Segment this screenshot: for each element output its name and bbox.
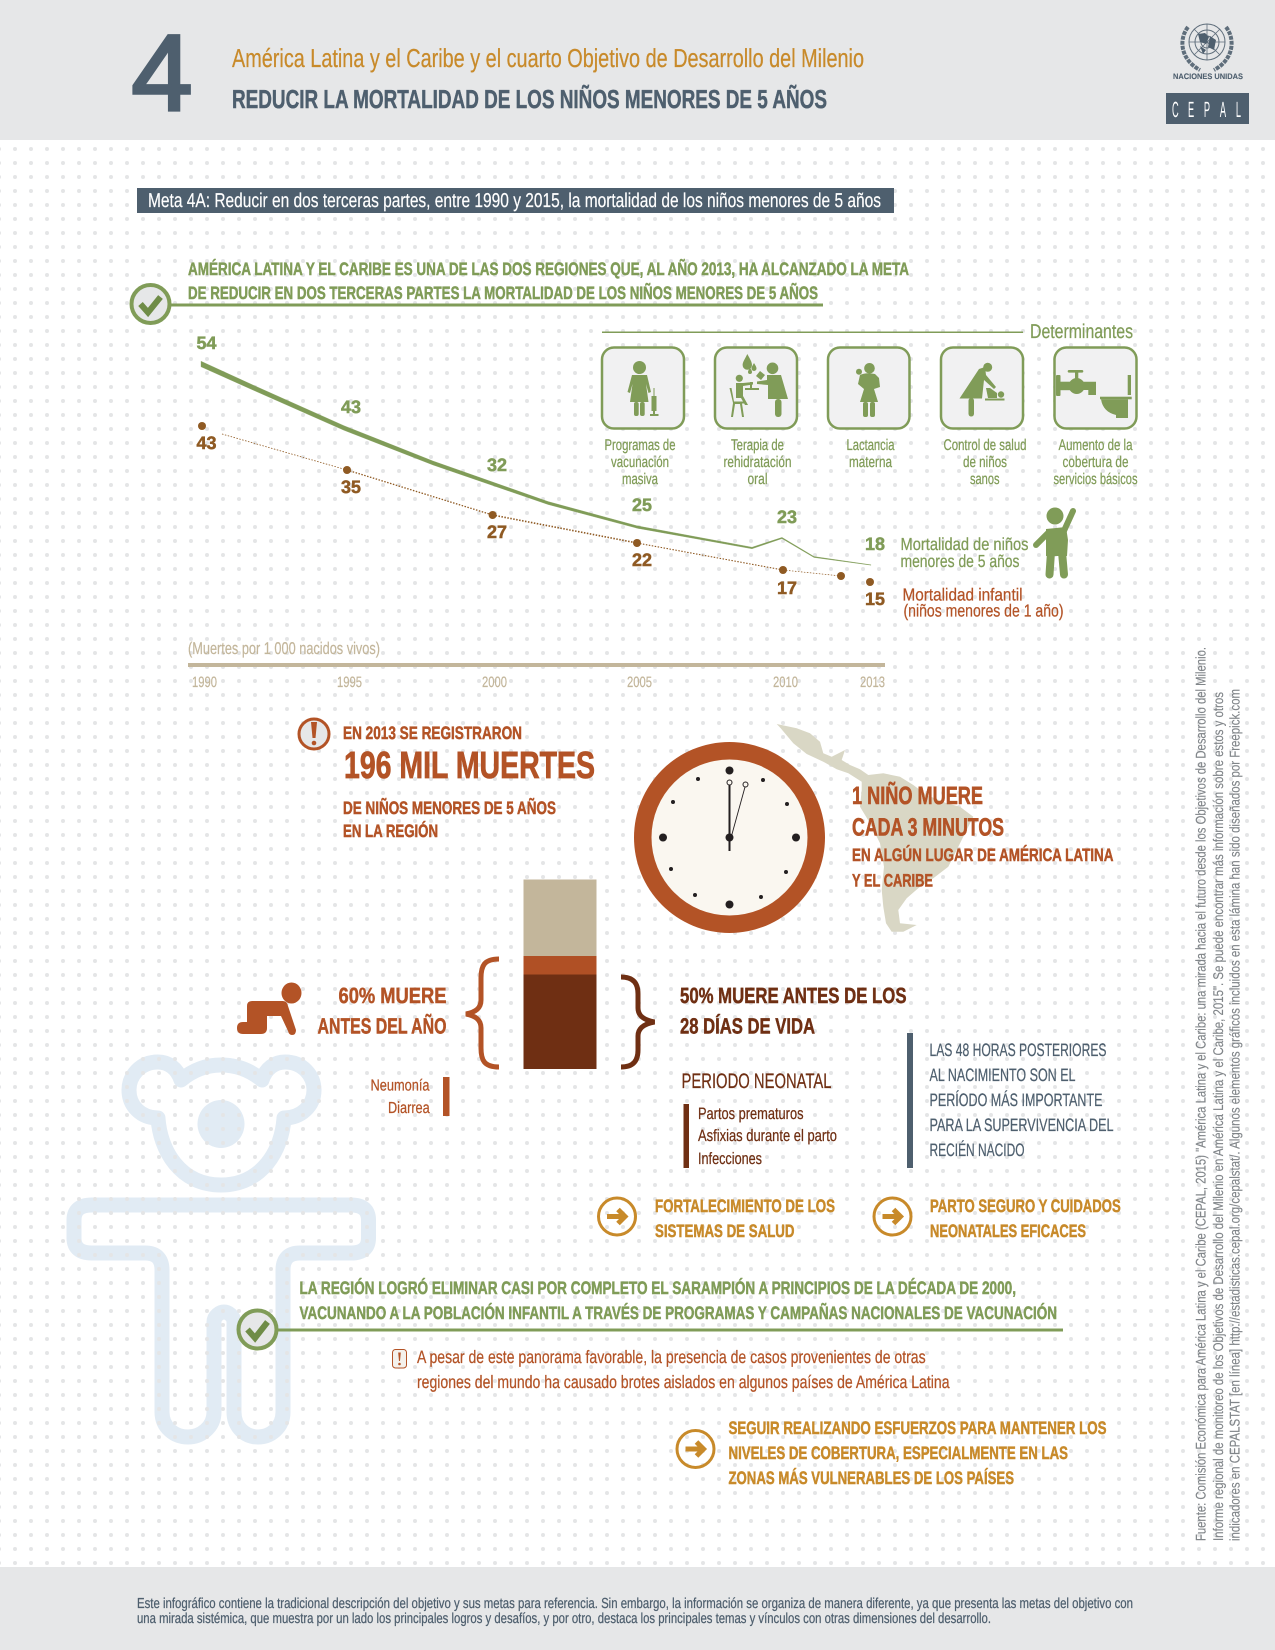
- text: 50% die before 28 days: 50% MUERE ANTES DE LOS: [680, 983, 906, 1008]
- text: 50% die before 28 days: 28 DÍAS DE VIDA: [680, 1014, 815, 1038]
- callout: first 48 hours: PERÍODO MÁS IMPORTANTE: [930, 1090, 1102, 1110]
- legend: under-5 mortality: menores de 5 años: [900, 551, 1020, 571]
- text: 60% die before one year: ANTES DEL AÑO: [318, 1014, 446, 1038]
- icon: mother caring for baby: [960, 363, 1004, 416]
- achievement: measles: [238, 1278, 1063, 1348]
- goal banner: Meta 4A: Reducir en dos terceras partes, entre 1990 y 2015, la mortalidad de los niños menores de 5 años: [148, 190, 881, 212]
- year labels: 2013: [860, 674, 885, 691]
- text: 50% die before 28 days: [680, 983, 906, 1038]
- list: post-neonatal causes: Diarrea: [388, 1100, 430, 1117]
- infant values: 35: [341, 477, 361, 497]
- callout: first 48 hours: PARA LA SUPERVIVENCIA DEL: [930, 1115, 1114, 1135]
- map: Latin America: [777, 724, 973, 932]
- list: post-neonatal causes: Neumonía: [370, 1078, 430, 1094]
- alert: deaths in 2013: DE NIÑOS MENORES DE 5 AÑOS: [343, 797, 556, 818]
- infant values: [196, 433, 885, 609]
- year labels: 1995: [337, 674, 362, 691]
- icon: arrow: [677, 1430, 714, 1468]
- alert: deaths in 2013: [299, 719, 595, 841]
- determinant: breastfeeding: materna: [849, 454, 892, 471]
- callout: one child every 3 minutes: 1 NIÑO MUERE: [852, 781, 983, 810]
- series: infant mortality dotted line: [222, 434, 841, 576]
- infant values: 22: [632, 550, 652, 570]
- year labels: 2000: [482, 674, 507, 691]
- action: keep coverage: ZONAS MÁS VULNERABLES DE LOS PAÍSES: [728, 1468, 1014, 1488]
- legend: infant mortality: [902, 584, 1064, 620]
- clock: [634, 742, 825, 933]
- series: infant mortality points: [198, 422, 874, 586]
- year labels: 2005: [627, 674, 652, 691]
- icon: alert: [299, 719, 329, 749]
- action: keep coverage: [677, 1418, 1106, 1488]
- action: keep coverage: SEGUIR REALIZANDO ESFUERZOS PARA MANTENER LOS: [728, 1418, 1106, 1438]
- icon: arrow: [598, 1198, 636, 1235]
- header title: América Latina y el Caribe y el cuarto Objetivo de Desarrollo del Milenio: [232, 43, 864, 73]
- clock hands: [727, 780, 748, 851]
- callout: first 48 hours: AL NACIMIENTO SON EL: [930, 1065, 1076, 1085]
- under-5 values: [196, 333, 885, 554]
- determinant: oral rehydration: oral: [748, 471, 768, 488]
- logo: CEPAL: [1166, 93, 1249, 124]
- series: under-5 mortality line: [201, 361, 871, 565]
- list: neonatal causes: Asfixias durante el parto: [698, 1127, 837, 1145]
- action: strengthen health systems: [598, 1196, 835, 1241]
- action: safe childbirth: [874, 1196, 1121, 1241]
- action: safe childbirth: PARTO SEGURO Y CUIDADOS: [930, 1196, 1121, 1216]
- axis unit label: (Muertes por 1 000 nacidos vivos): [188, 639, 380, 658]
- action: safe childbirth: NEONATALES EFICACES: [930, 1221, 1086, 1241]
- determinant: oral rehydration: rehidratación: [724, 454, 792, 471]
- achievement heading: AMÉRICA LATINA Y EL CARIBE ES UNA DE LAS DOS REGIONES QUE, AL AÑO 2013, HA ALCANZADO LA META: [188, 258, 909, 279]
- achievement: measles: LA REGIÓN LOGRÓ ELIMINAR CASI POR COMPLETO EL SARAMPIÓN A PRINCIPIOS DE LA DÉCADA DE 2000,: [300, 1278, 1016, 1298]
- callout: one child every 3 minutes: Y EL CARIBE: [852, 870, 933, 890]
- icon: check mark: [132, 285, 170, 323]
- text: 60% die before one year: 60% MUERE: [338, 983, 446, 1008]
- infant values: 17: [777, 578, 797, 598]
- achievement heading: [132, 258, 909, 323]
- determinant: breastfeeding: Lactancia: [846, 437, 895, 454]
- under-5 values: 25: [632, 495, 652, 515]
- footer: [0, 1567, 1275, 1650]
- list: neonatal causes: PERIODO NEONATAL: [682, 1070, 832, 1093]
- source note (vertical): [1192, 647, 1242, 1541]
- list: neonatal causes: Partos prematuros: [698, 1105, 804, 1123]
- logo: CEPAL: CEPAL: [1172, 97, 1241, 122]
- achievement heading: DE REDUCIR EN DOS TERCERAS PARTES LA MORTALIDAD DE LOS NIÑOS MENORES DE 5 AÑOS: [188, 282, 818, 303]
- callout: one child every 3 minutes: CADA 3 MINUTOS: [852, 814, 1004, 842]
- header subtitle: REDUCIR LA MORTALIDAD DE LOS NIÑOS MENORES DE 5 AÑOS: [232, 84, 827, 114]
- icon: mother with baby: [856, 363, 880, 417]
- list: post-neonatal causes: [370, 1077, 450, 1117]
- determinant: well-child care: [941, 348, 1026, 488]
- icon: check mark: [238, 1310, 276, 1348]
- logo: Naciones Unidas: NACIONES UNIDAS: [1173, 72, 1244, 81]
- year labels: [192, 674, 885, 691]
- legend: under-5 mortality: Mortalidad de niños: [900, 534, 1029, 554]
- determinant: oral rehydration: [715, 348, 797, 488]
- determinant: water and sanitation: cobertura de: [1062, 454, 1128, 471]
- text: 60% die before one year: [318, 983, 446, 1038]
- icon: child waving: [1036, 508, 1073, 574]
- determinant: well-child care: Control de salud: [944, 437, 1026, 454]
- icon: alert box: [392, 1350, 406, 1368]
- action: strengthen health systems: FORTALECIMIENTO DE LOS: [655, 1196, 835, 1216]
- icon: doctor with syringe: [628, 361, 658, 416]
- determinant: breastfeeding: [828, 348, 910, 471]
- legend: infant mortality: Mortalidad infantil: [902, 584, 1022, 604]
- alert: deaths in 2013: 196 MIL MUERTES: [344, 745, 595, 787]
- footer: una mirada sistémica, que muestra por un lado los principales logros y desafíos, y por otro, destaca los principales temas y vínculos con otras dimensiones del desarrollo.: [137, 1611, 991, 1627]
- infant values: 15: [865, 589, 885, 609]
- under-5 values: 43: [341, 397, 361, 417]
- year labels: 1990: [192, 674, 217, 691]
- determinant: well-child care: sanos: [970, 471, 1000, 488]
- under-5 values: 23: [777, 507, 797, 527]
- source note (vertical): indicadores en CEPALSTAT [en línea] http://estadisticas.cepal.org/cepalstat/. Algunos elementos gráficos incluidos en esta lámina han sido diseñados por Freepick.com: [1226, 689, 1242, 1541]
- header band: [0, 0, 1275, 140]
- under-5 values: 18: [865, 534, 885, 554]
- determinant: vaccination: vacunación: [611, 454, 669, 471]
- warning: outbreaks: [392, 1347, 950, 1392]
- source note (vertical): Informe regional de monitoreo de los Objetivos de Desarrollo del Milenio en América Latina y el Caribe, 2015". Se puede encontrar más información sobre estos y otros: [1210, 692, 1226, 1541]
- icon: crawling baby: [237, 982, 302, 1035]
- callout: first 48 hours: RECIÉN NACIDO: [930, 1140, 1024, 1160]
- source note (vertical): Fuente: Comisión Económica para América Latina y el Caribe (CEPAL, 2015) "América Latina y el Caribe: una mirada hacia el futuro desde los Objetivos de Desarrollo del Milenio.: [1192, 647, 1208, 1541]
- line chart: mortality 1990-2013: [188, 333, 885, 691]
- alert: deaths in 2013: EN 2013 SE REGISTRARON: [343, 723, 522, 743]
- determinant: water and sanitation: servicios básicos: [1054, 471, 1138, 488]
- determinant: water and sanitation: Aumento de la: [1058, 437, 1133, 454]
- icon: arrow: [874, 1198, 911, 1235]
- infant values: 43: [196, 433, 216, 453]
- background figure: child silhouette: [74, 1062, 368, 1437]
- legend: under-5 mortality: [900, 534, 1029, 571]
- axis bar: [188, 663, 885, 667]
- callout: one child every 3 minutes: [852, 781, 1114, 890]
- list: neonatal causes: [682, 1070, 837, 1168]
- right brace: [621, 977, 654, 1067]
- callout: first 48 hours: LAS 48 HORAS POSTERIORES: [930, 1040, 1106, 1060]
- callout: one child every 3 minutes: EN ALGÚN LUGAR DE AMÉRICA LATINA: [852, 845, 1114, 865]
- legend: infant mortality: (niños menores de 1 año): [904, 600, 1064, 620]
- action: keep coverage: NIVELES DE COBERTURA, ESPECIALMENTE EN LAS: [728, 1443, 1068, 1463]
- under-5 values: 54: [196, 333, 216, 353]
- left brace: [466, 959, 499, 1067]
- icon: oral rehydration therapy: [730, 354, 788, 417]
- determinant: vaccination: [602, 348, 684, 488]
- determinant: vaccination: masiva: [622, 471, 658, 488]
- logo: Naciones Unidas: [1173, 24, 1244, 81]
- determinant: vaccination: Programas de: [604, 437, 676, 454]
- determinants heading: Determinantes: [1030, 321, 1133, 343]
- infant values: 27: [487, 522, 507, 542]
- determinant: well-child care: de niños: [963, 454, 1007, 471]
- callout: first 48 hours: [907, 1033, 1114, 1168]
- under-5 values: 32: [487, 455, 507, 475]
- warning: outbreaks: regiones del mundo ha causado brotes aislados en algunos países de América Latina: [417, 1372, 950, 1392]
- warning: outbreaks: A pesar de este panorama favorable, la presencia de casos provenientes de otras: [417, 1347, 926, 1367]
- action: strengthen health systems: SISTEMAS DE SALUD: [655, 1221, 794, 1241]
- determinant: water and sanitation: [1054, 348, 1138, 488]
- stacked bar: deaths by age: [524, 880, 596, 1069]
- alert: deaths in 2013: EN LA REGIÓN: [343, 821, 438, 841]
- list: neonatal causes: Infecciones: [698, 1150, 762, 1168]
- determinant: oral rehydration: Terapia de: [731, 437, 784, 454]
- year labels: 2010: [773, 674, 798, 691]
- icon: faucet and toilet: [1056, 370, 1132, 418]
- goal number 4: 4: [132, 12, 192, 133]
